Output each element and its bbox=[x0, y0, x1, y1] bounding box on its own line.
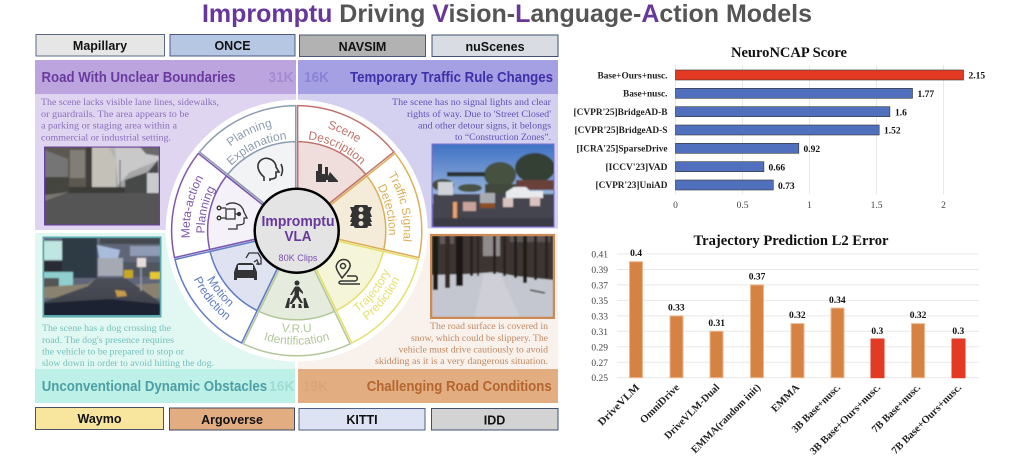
chart: NeuroNCAP score: 0.66 bbox=[768, 164, 785, 174]
panel: temporary traffic rule changes: Temporary Traffic Rule Changes bbox=[350, 70, 553, 86]
panel: road with unclear boundaries: a parking or staging area within a bbox=[41, 122, 178, 132]
chart: trajectory prediction L2 error: EMMA(random init) bbox=[690, 382, 763, 456]
panel: unconventional dynamic obstacles: The scene has a dog crossing the bbox=[42, 324, 171, 334]
chart: trajectory prediction L2 error: 0.35 bbox=[591, 297, 608, 307]
segment: planning explanation: Planning bbox=[226, 120, 272, 146]
top dataset labels: nuScenes bbox=[465, 40, 525, 54]
chart: NeuroNCAP score: 0 bbox=[673, 201, 678, 211]
top dataset labels: NAVSIM bbox=[339, 40, 386, 54]
chart: trajectory prediction L2 error: 0.3 bbox=[952, 327, 964, 337]
chart: trajectory prediction L2 error: 3B Base+Ours+nusc. bbox=[808, 382, 883, 457]
bottom dataset labels: Waymo bbox=[78, 412, 122, 426]
segment: planning explanation: Explanation bbox=[226, 133, 286, 166]
photo: construction zone bbox=[432, 144, 555, 228]
title: Impromptu Driving Vision-Language-Action Models bbox=[202, 0, 812, 28]
panel: unconventional dynamic obstacles: slow down in order to avoid hitting the dog. bbox=[42, 359, 214, 369]
segment: trajectory prediction: Trajectory bbox=[352, 269, 390, 311]
chart: NeuroNCAP score bbox=[574, 45, 985, 211]
chart: NeuroNCAP score: 2.15 bbox=[968, 72, 985, 82]
chart: NeuroNCAP score: 1.5 bbox=[871, 201, 883, 211]
chart title: NeuroNCAP Score bbox=[731, 45, 847, 61]
chart: trajectory prediction L2 error: 3B Base+nusc. bbox=[790, 382, 843, 435]
chart: trajectory prediction L2 error: 0.37 bbox=[749, 272, 766, 282]
segment: vru identification: V.R.U bbox=[282, 323, 311, 333]
center hub: 80K Clips bbox=[278, 253, 318, 263]
chart: NeuroNCAP score: [CVPR'23]UniAD bbox=[596, 181, 668, 191]
chart: trajectory prediction L2 error: 0.31 bbox=[591, 328, 608, 338]
chart: trajectory prediction L2 error bbox=[591, 233, 979, 457]
chart: NeuroNCAP score: Base+Ours+nusc. bbox=[598, 72, 668, 82]
icon: pedestrian crossing bbox=[285, 280, 309, 308]
icon: car bbox=[234, 253, 261, 280]
chart: NeuroNCAP score: [ICCV'23]VAD bbox=[606, 163, 668, 173]
panel: challenging road conditions bbox=[298, 233, 558, 403]
panel: temporary traffic rule changes: to “Construction Zones”. bbox=[455, 133, 551, 143]
panel: unconventional dynamic obstacles: road. The dog's presence requires bbox=[42, 336, 174, 346]
panel: challenging road conditions: skidding as it is a very dangerous situation. bbox=[375, 357, 548, 367]
wheel diagram bbox=[166, 100, 428, 362]
segment: scene description: Scene bbox=[328, 121, 360, 142]
chart: NeuroNCAP score: [CVPR'25]BridgeAD-S bbox=[574, 126, 668, 136]
panel: temporary traffic rule changes: and other detour signs, it belongs bbox=[418, 122, 551, 132]
bottom dataset labels bbox=[36, 408, 558, 430]
chart: trajectory prediction L2 error: 0.32 bbox=[910, 311, 927, 321]
icon: traffic light bbox=[350, 205, 372, 228]
photo: city street bbox=[44, 146, 160, 226]
photo: snowy road bbox=[430, 234, 555, 319]
icon: scene bbox=[316, 164, 338, 182]
panel: challenging road conditions: The road surface is covered in bbox=[430, 321, 548, 332]
chart: trajectory prediction L2 error: 0.32 bbox=[789, 311, 806, 321]
chart: trajectory prediction L2 error: 0.4 bbox=[630, 249, 642, 259]
bottom dataset labels: KITTI bbox=[346, 413, 378, 427]
segment: scene description: Description bbox=[308, 131, 364, 164]
chart: trajectory prediction L2 error: 0.25 bbox=[591, 374, 608, 384]
segment: trajectory prediction: Prediction bbox=[362, 278, 400, 320]
chart: trajectory prediction L2 error: 7B Base+Ours+nusc. bbox=[890, 382, 964, 457]
panel: road with unclear boundaries: commercial or industrial setting. bbox=[41, 134, 171, 144]
panel: challenging road conditions: Challenging Road Conditions bbox=[367, 379, 552, 395]
bottom dataset labels: Argoverse bbox=[201, 413, 263, 427]
chart: NeuroNCAP score: 1.77 bbox=[918, 90, 934, 100]
panel: temporary traffic rule changes: 16K bbox=[304, 70, 329, 86]
chart: trajectory prediction L2 error: 0.39 bbox=[591, 266, 608, 276]
segment: motion prediction: Prediction bbox=[194, 276, 230, 320]
segment: motion prediction bbox=[174, 240, 278, 344]
segment: traffic signal detection: Traffic Signal bbox=[390, 170, 412, 242]
chart: trajectory prediction L2 error: DriveVLM bbox=[596, 382, 642, 428]
segment: trajectory prediction bbox=[316, 240, 420, 344]
panel: challenging road conditions: vehicle must drive cautiously to avoid bbox=[398, 346, 548, 356]
panel: temporary traffic rule changes bbox=[298, 60, 558, 228]
panel: road with unclear boundaries: 31K bbox=[268, 70, 294, 86]
panel: challenging road conditions: 19K bbox=[302, 379, 328, 395]
segment: motion prediction: Motion bbox=[207, 276, 232, 307]
chart: NeuroNCAP score: 0.92 bbox=[804, 145, 820, 155]
center hub: Impromptu bbox=[262, 213, 334, 230]
panel: unconventional dynamic obstacles: the vehicle to be prepared to stop or bbox=[42, 348, 185, 358]
panel: temporary traffic rule changes: The scene has no signal lights and clear bbox=[392, 98, 552, 108]
chart: trajectory prediction L2 error: EMMA bbox=[770, 382, 802, 415]
center hub bbox=[255, 189, 339, 273]
segment: scene description bbox=[296, 104, 395, 204]
panel: road with unclear boundaries bbox=[35, 60, 296, 230]
panel: unconventional dynamic obstacles: 16K bbox=[269, 379, 295, 395]
panel: unconventional dynamic obstacles bbox=[35, 233, 295, 403]
panel: unconventional dynamic obstacles: Unconventional Dynamic Obstacles bbox=[42, 379, 267, 395]
top dataset labels bbox=[36, 34, 558, 56]
chart: NeuroNCAP score: 2 bbox=[941, 201, 946, 211]
segment: meta-action planning: Meta-action bbox=[181, 176, 204, 238]
panel: temporary traffic rule changes: rights of way. Due to 'Street Closed' bbox=[407, 109, 551, 120]
chart: NeuroNCAP score: 1.52 bbox=[884, 126, 901, 136]
chart: trajectory prediction L2 error: 7B Base+nusc. bbox=[870, 382, 923, 435]
chart: trajectory prediction L2 error: 0.34 bbox=[829, 296, 846, 306]
segment: planning explanation bbox=[198, 104, 296, 204]
center hub: VLA bbox=[284, 228, 312, 245]
chart: trajectory prediction L2 error: 0.41 bbox=[591, 250, 608, 260]
segment: traffic signal detection: Detection bbox=[378, 184, 397, 235]
chart: trajectory prediction L2 error: 0.37 bbox=[591, 282, 608, 292]
segment: traffic signal detection bbox=[330, 152, 423, 258]
chart: trajectory prediction L2 error: 0.33 bbox=[591, 312, 608, 322]
segment: vru identification bbox=[242, 270, 351, 356]
panel: road with unclear boundaries: Road With Unclear Boundaries bbox=[42, 70, 236, 86]
chart: trajectory prediction L2 error: OmniDrive bbox=[638, 382, 682, 426]
chart: NeuroNCAP score: [ICRA'25]SparseDrive bbox=[576, 144, 668, 154]
top dataset labels: ONCE bbox=[214, 39, 251, 53]
chart: NeuroNCAP score: 1.6 bbox=[895, 108, 907, 118]
chart: trajectory prediction L2 error: DriveVLM-Dual bbox=[663, 382, 722, 442]
panel: road with unclear boundaries: The scene lacks visible lane lines, sidewalks, bbox=[41, 98, 219, 108]
chart: trajectory prediction L2 error: 0.27 bbox=[591, 359, 608, 369]
icon: meta planning head bbox=[217, 203, 247, 229]
chart: NeuroNCAP score: 0.73 bbox=[778, 182, 795, 192]
segment: meta-action planning bbox=[170, 152, 263, 258]
bottom dataset labels: IDD bbox=[484, 414, 505, 428]
icon: speaking head bbox=[258, 158, 282, 181]
chart title: Trajectory Prediction L2 Error bbox=[694, 233, 889, 249]
segment: meta-action planning: Planning bbox=[196, 186, 216, 232]
chart: NeuroNCAP score: 1 bbox=[807, 201, 812, 211]
chart: trajectory prediction L2 error: 0.33 bbox=[668, 304, 685, 314]
chart: trajectory prediction L2 error: 0.31 bbox=[708, 319, 725, 329]
chart: NeuroNCAP score: Base+nusc. bbox=[623, 90, 668, 100]
chart: NeuroNCAP score: 0.5 bbox=[737, 201, 749, 211]
chart: trajectory prediction L2 error: 0.29 bbox=[591, 344, 608, 354]
icon: trajectory pin bbox=[336, 260, 360, 284]
top dataset labels: Mapillary bbox=[73, 39, 127, 53]
segment: vru identification: Identification bbox=[264, 332, 330, 345]
panel: road with unclear boundaries: or guardrails. The area appears to be bbox=[41, 110, 189, 120]
photo: dog crossing road bbox=[42, 236, 162, 318]
chart: trajectory prediction L2 error: 0.3 bbox=[871, 327, 883, 337]
chart: NeuroNCAP score: [CVPR'25]BridgeAD-B bbox=[574, 108, 668, 118]
panel: challenging road conditions: snow, which could be slippery. The bbox=[411, 334, 548, 344]
